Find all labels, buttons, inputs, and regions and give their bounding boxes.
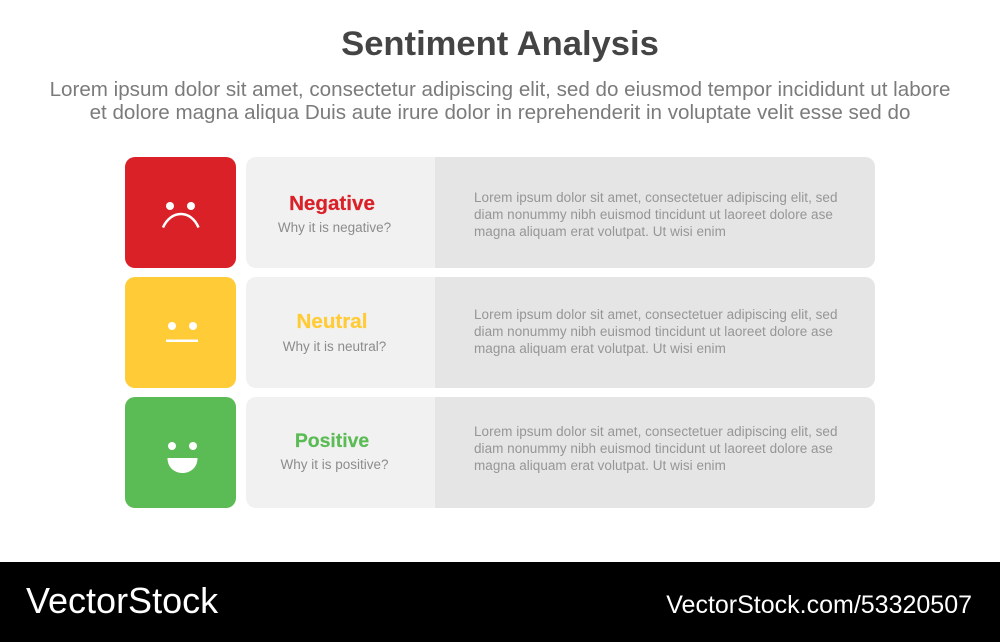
- question: positive: Why it is positive?: [280, 457, 389, 472]
- description: negative: diam nonummy nibh euismod tincidunt ut laoreet dolore ase: [474, 207, 833, 222]
- panel: neutral: [246, 277, 875, 388]
- heading: positive: Positive: [295, 430, 369, 452]
- subtitle text: Lorem ipsum dolor sit amet, consectetur adipiscing elit, sed do eiusmod tempor incididunt ut labore: [50, 78, 950, 101]
- description: neutral: Lorem ipsum dolor sit amet, consectetuer adipiscing elit, sed: [474, 307, 838, 322]
- panel: positive: [246, 397, 875, 508]
- watermark logo: VectorStock: [26, 580, 218, 621]
- icon: neutral face: [125, 277, 236, 388]
- icon: negative face: [125, 157, 236, 268]
- question: neutral: Why it is neutral?: [283, 339, 386, 354]
- description: positive: diam nonummy nibh euismod tincidunt ut laoreet dolore ase: [474, 441, 833, 456]
- heading: negative: Negative: [289, 192, 375, 215]
- panel: negative: [246, 157, 875, 268]
- description: negative: magna aliquam erat volutpat. Ut wisi enim: [474, 224, 726, 239]
- watermark url: VectorStock.com/53320507: [666, 591, 972, 619]
- description: positive: Lorem ipsum dolor sit amet, consectetuer adipiscing elit, sed: [474, 424, 838, 439]
- description: neutral: [474, 307, 838, 356]
- subtitle text: [50, 78, 950, 124]
- title: Sentiment Analysis: [341, 25, 659, 63]
- description: negative: Lorem ipsum dolor sit amet, consectetuer adipiscing elit, sed: [474, 190, 838, 205]
- description: neutral: magna aliquam erat volutpat. Ut wisi enim: [474, 341, 726, 356]
- watermark bar: [0, 562, 1000, 642]
- description: positive: magna aliquam erat volutpat. Ut wisi enim: [474, 458, 726, 473]
- subtitle text: et dolore magna aliqua Duis aute irure dolor in reprehenderit in voluptate velit esse sed do: [90, 100, 910, 124]
- heading: neutral: Neutral: [297, 310, 367, 333]
- description: negative: [474, 190, 838, 239]
- icon: positive face: [125, 397, 236, 508]
- question: negative: Why it is negative?: [278, 220, 391, 235]
- description: positive: [474, 424, 838, 473]
- description: neutral: diam nonummy nibh euismod tincidunt ut laoreet dolore ase: [474, 324, 833, 339]
